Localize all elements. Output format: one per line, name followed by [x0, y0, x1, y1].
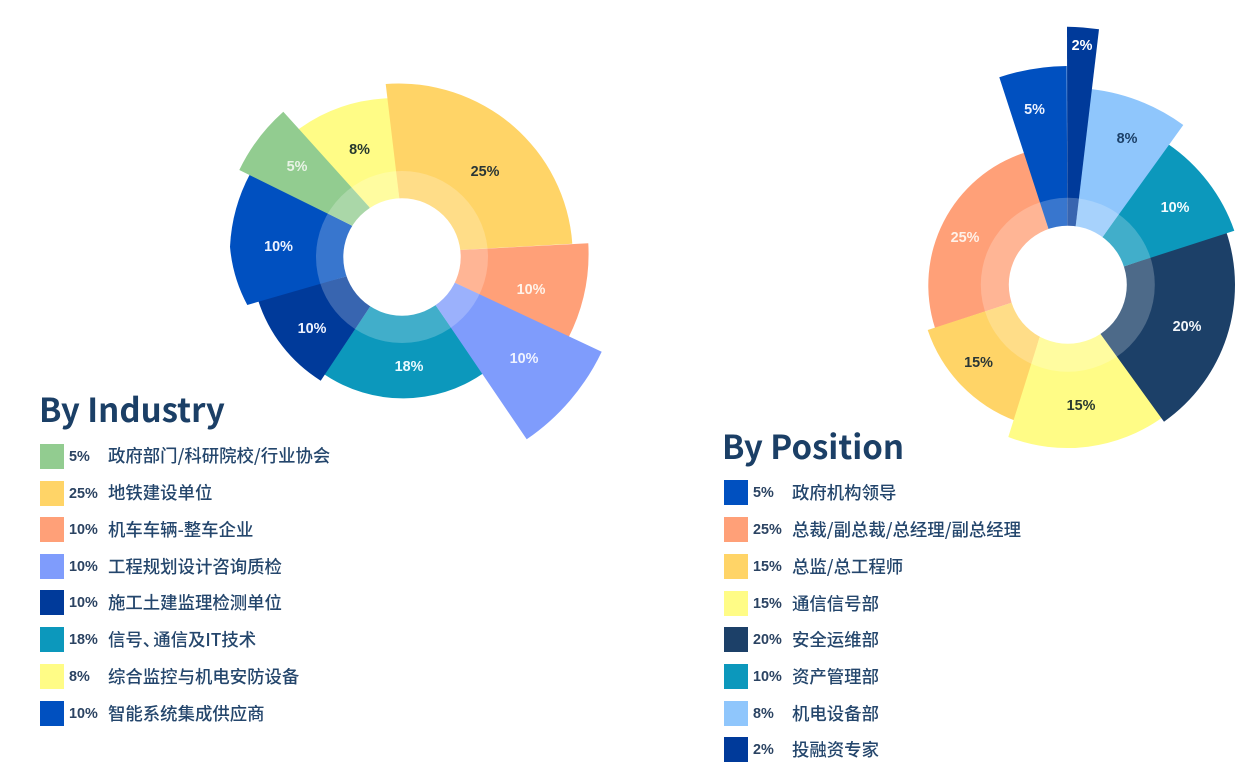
- slice: 8% electromechanical: [1068, 89, 1183, 285]
- legend row: 10% integrators: 10%: [69, 706, 98, 722]
- legend row: 20%: [724, 627, 879, 652]
- labels: [264, 142, 546, 375]
- slice: 18% signal and communications: [324, 257, 483, 398]
- legend row: 8%: 8%: [753, 706, 774, 722]
- slice: 10% rolling stock: [402, 243, 589, 338]
- legend row: 25%: 地铁建设单位: [108, 480, 212, 504]
- heading: By Position: By Position: [722, 421, 904, 469]
- slice: 10% asset management: [1068, 144, 1234, 285]
- legend row: 10% integrators: 智能系统集成供应商: [108, 700, 265, 726]
- legend row: 2%: [724, 737, 879, 762]
- labels: 15%: [964, 355, 993, 371]
- legend row: 10% engineering: 10%: [69, 559, 98, 575]
- legend row: 10%: 资产管理部: [792, 664, 879, 689]
- legend row: 8%: 机电设备部: [792, 701, 879, 726]
- slice: 20% safety operations: [1068, 231, 1235, 422]
- slice: 2% investment experts: [1067, 27, 1099, 285]
- legend row: 15% signal: [724, 590, 879, 616]
- slice: 8% comprehensive monitoring: [298, 98, 402, 257]
- slice: 15% director chief engineer: [928, 285, 1068, 421]
- labels: 20%: [1173, 319, 1202, 335]
- legend row: 25%: 25%: [753, 522, 782, 538]
- slice: 15% signal communications: [1008, 285, 1163, 448]
- labels: 25%: [471, 164, 500, 180]
- labels: 18%: [395, 359, 424, 375]
- slice: 25% metro construction: [386, 84, 572, 257]
- legend row: 10% civil: 施工土建监理检测单位: [108, 590, 282, 615]
- legend row: 8%: 8%: [69, 669, 90, 685]
- slice: 5% government leaders: [999, 66, 1068, 285]
- legend row: 20%: 20%: [753, 632, 782, 648]
- labels: 8%: [1117, 131, 1138, 147]
- legend row: 15% signal: 通信信号部: [792, 590, 879, 616]
- legend row: 5%: 政府部门/科研院校/行业协会: [108, 443, 330, 468]
- slice: 5% government and institutions: [239, 112, 402, 257]
- legend row: 5%: [724, 480, 896, 505]
- legend: by industry: [40, 443, 330, 726]
- legend row: 2%: 2%: [753, 742, 774, 758]
- legend row: 25%: [40, 480, 212, 506]
- chart: by industry nested pie: [230, 84, 602, 439]
- legend row: 15% signal: 15%: [753, 596, 782, 612]
- labels: 10%: [517, 282, 546, 298]
- legend row: 15% director: 15%: [753, 559, 782, 575]
- labels: 5%: [1024, 102, 1045, 118]
- legend row: 5%: 5%: [69, 449, 90, 465]
- legend row: 5%: 政府机构领导: [792, 480, 896, 505]
- labels: 5%: [287, 159, 308, 175]
- slice: 10% engineering planning: [402, 257, 602, 439]
- legend row: 18%: 18%: [69, 632, 98, 648]
- heading: By Industry: By Industry: [39, 384, 225, 432]
- legend row: 25%: 总裁/副总裁/总经理/副总经理: [792, 517, 1021, 542]
- slice: 10% civil supervision: [258, 257, 402, 381]
- labels: [951, 38, 1202, 414]
- inner translucent ring: [981, 198, 1155, 372]
- legend row: 10% rolling stock: [40, 517, 253, 542]
- legend row: 15% director: [724, 554, 903, 579]
- slice: 25% executives: [928, 152, 1068, 328]
- legend row: 25%: 25%: [69, 486, 98, 502]
- labels: 10%: [1161, 200, 1190, 216]
- legend: by position: [724, 480, 1021, 762]
- labels: 10%: [298, 321, 327, 337]
- legend row: 10% integrators: [40, 700, 265, 726]
- legend row: 5%: 5%: [753, 485, 774, 501]
- legend row: 10% rolling stock: 10%: [69, 522, 98, 538]
- legend row: 10%: 10%: [753, 669, 782, 685]
- legend row: 15% director: 总监/总工程师: [792, 554, 903, 579]
- legend row: 20%: 安全运维部: [792, 627, 879, 652]
- labels: 10%: [510, 351, 539, 367]
- legend row: 8%: 综合监控与机电安防设备: [108, 664, 299, 689]
- centre hole: [343, 198, 461, 316]
- labels: 2%: [1072, 38, 1093, 54]
- labels: 8%: [349, 142, 370, 158]
- labels: 15%: [1067, 398, 1096, 414]
- centre hole: [1009, 226, 1127, 344]
- labels: 10%: [264, 239, 293, 255]
- inner translucent ring: [316, 171, 488, 343]
- legend row: 10% rolling stock: 机车车辆-整车企业: [108, 517, 253, 542]
- legend row: 10% engineering: 工程规划设计咨询质检: [108, 554, 282, 579]
- legend row: 18%: 信号、通信及IT技术: [108, 627, 256, 652]
- legend row: 18%: [40, 627, 256, 652]
- labels: 25%: [951, 230, 980, 246]
- legend row: 10% civil: 10%: [69, 595, 98, 611]
- legend row: 10%: [724, 664, 879, 689]
- legend row: 8%: [724, 701, 879, 726]
- slice: 10% system integrators: [230, 174, 402, 305]
- chart: by position nested pie: [928, 27, 1235, 448]
- legend row: 2%: 投融资专家: [792, 737, 879, 762]
